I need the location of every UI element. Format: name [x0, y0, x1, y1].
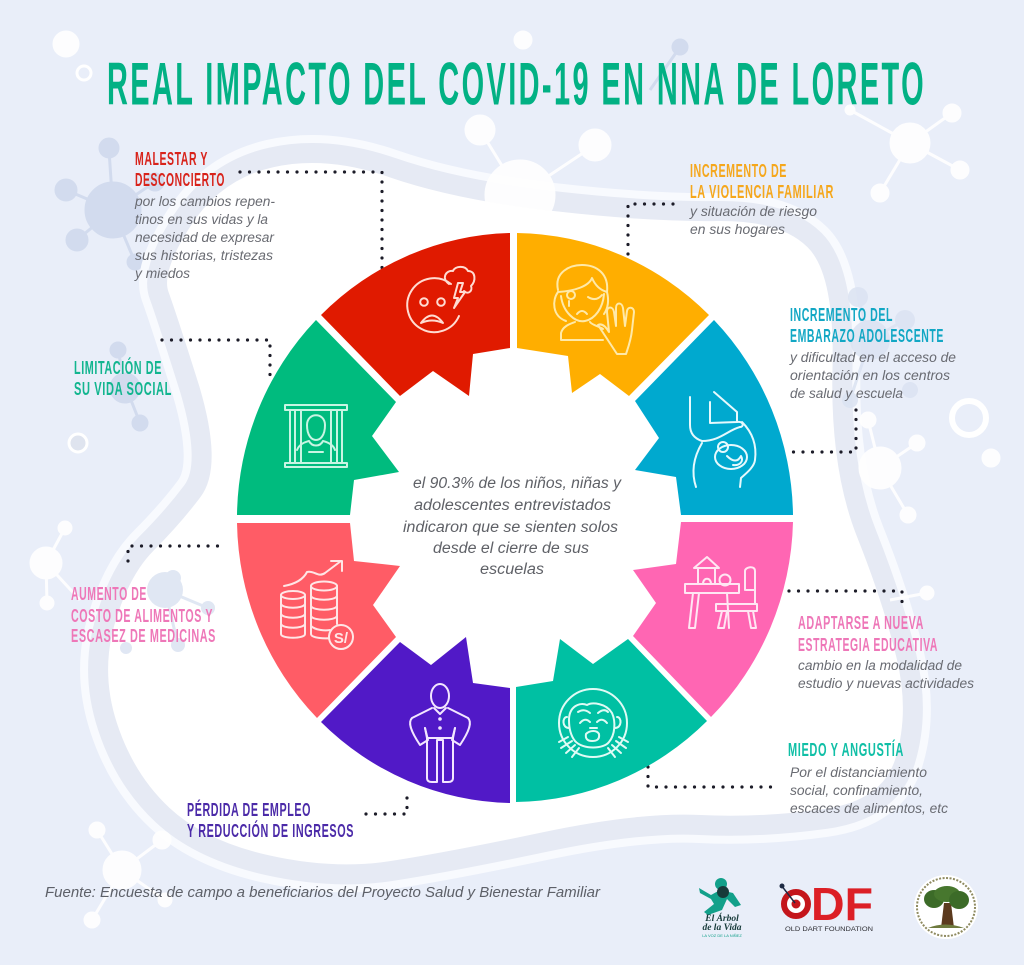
- center text: escuelas: [480, 561, 544, 578]
- logo: tree seal: [914, 875, 978, 939]
- icon: pregnant belly: [690, 392, 755, 487]
- logo: El Arbol de la Vida: LA VOZ DE LA NIÑEZ: [702, 933, 742, 938]
- callout: embarazo adolescente: [789, 305, 956, 401]
- center text: adolescentes entrevistados: [414, 497, 611, 514]
- segment: costos (coral): [237, 523, 400, 718]
- connector dots: [128, 172, 902, 814]
- callout: malestar: sus historias, tristezas: [135, 248, 273, 263]
- callout: violencia familiar: [689, 161, 834, 237]
- callout: embarazo adolescente: orientación en los centros: [790, 368, 950, 383]
- callout: costos: COSTO DE ALIMENTOS Y: [71, 606, 213, 626]
- callout: vida social: SU VIDA SOCIAL: [74, 379, 172, 399]
- callout: miedo y angustia: MIEDO Y ANGUSTÍA: [788, 739, 904, 760]
- icon: kids table and chair: [685, 557, 757, 628]
- callout: violencia familiar: INCREMENTO DE: [690, 161, 787, 181]
- segment: miedo (teal): [516, 639, 707, 802]
- center text: indicaron que se sienten solos: [403, 519, 618, 536]
- callout: malestar: MALESTAR Y: [135, 149, 208, 169]
- callout: miedo y angustia: social, confinamiento,: [790, 783, 923, 798]
- callout: estrategia educativa: ADAPTARSE A NUEVA: [798, 613, 924, 633]
- callout: estrategia educativa: estudio y nuevas actividades: [798, 676, 974, 691]
- callout: malestar: [134, 149, 275, 281]
- callout: violencia familiar: en sus hogares: [690, 222, 785, 237]
- callout: malestar: tinos en sus vidas y la: [135, 212, 268, 227]
- callout: embarazo adolescente: INCREMENTO DEL: [790, 305, 893, 325]
- callout: miedo y angustia: [788, 739, 948, 816]
- callout: violencia familiar: LA VIOLENCIA FAMILIAR: [690, 182, 834, 202]
- logo: ODF: OLD DART FOUNDATION: [785, 926, 873, 933]
- callout: embarazo adolescente: de salud y escuela: [790, 386, 903, 401]
- segment: malestar (red): [321, 233, 510, 396]
- segment: violencia (yellow): [517, 233, 709, 396]
- icon: person behind bars: [285, 405, 347, 467]
- callout: costos: ESCASEZ DE MEDICINAS: [71, 626, 216, 646]
- logo: El Arbol de la Vida: [699, 878, 742, 938]
- callout: empleo: PÉRDIDA DE EMPLEO: [187, 799, 311, 820]
- callout: costos: [71, 584, 216, 646]
- callout: embarazo adolescente: y dificultad en el acceso de: [789, 350, 956, 365]
- callout: violencia familiar: y situación de riesgo: [689, 204, 817, 219]
- callout: miedo y angustia: Por el distanciamiento: [790, 765, 927, 780]
- icon: frightened child: [559, 689, 628, 757]
- center text: [403, 475, 622, 578]
- source note: Fuente: Encuesta de campo a beneficiarios del Proyecto Salud y Bienestar Familiar: [45, 884, 601, 901]
- icon: sad face with storm: [407, 267, 474, 332]
- icon: coin stacks with rising arrow: S/: [334, 630, 349, 647]
- center text: desde el cierre de sus: [433, 540, 589, 557]
- callout: miedo y angustia: escaces de alimentos, etc: [790, 801, 948, 816]
- callout: estrategia educativa: [798, 613, 974, 691]
- segment: educacion (pink): [633, 522, 793, 717]
- icon: coin stacks with rising arrow: [281, 561, 353, 649]
- logo: El Arbol de la Vida: de la Vida: [702, 923, 742, 933]
- segment: vida social (green): [237, 320, 399, 515]
- callout: estrategia educativa: cambio en la modalidad de: [798, 658, 962, 673]
- callout: malestar: y miedos: [134, 266, 190, 281]
- segment: empleo (purple): [321, 637, 510, 803]
- logo: ODF: [780, 878, 873, 933]
- logo: ODF: DF: [811, 878, 873, 930]
- callout: vida social: [74, 357, 172, 399]
- callout: malestar: por los cambios repen-: [134, 194, 275, 209]
- callout: vida social: LIMITACIÓN DE: [74, 357, 162, 378]
- callout: costos: AUMENTO DE: [71, 584, 147, 604]
- callout: malestar: necesidad de expresar: [135, 230, 275, 245]
- callout: empleo: Y REDUCCIÓN DE INGRESOS: [187, 820, 354, 841]
- callout: empleo: [187, 799, 354, 841]
- center text: el 90.3% de los niños, niñas y: [413, 475, 622, 492]
- icon: crying girl with raised hand: [554, 265, 634, 354]
- callout: malestar: DESCONCIERTO: [135, 170, 225, 190]
- icon: man with empty pockets: [410, 684, 470, 782]
- ring of eight segments: [237, 233, 793, 803]
- logo: El Arbol de la Vida: El Árbol: [704, 912, 739, 924]
- segment: embarazo (blue): [635, 320, 793, 515]
